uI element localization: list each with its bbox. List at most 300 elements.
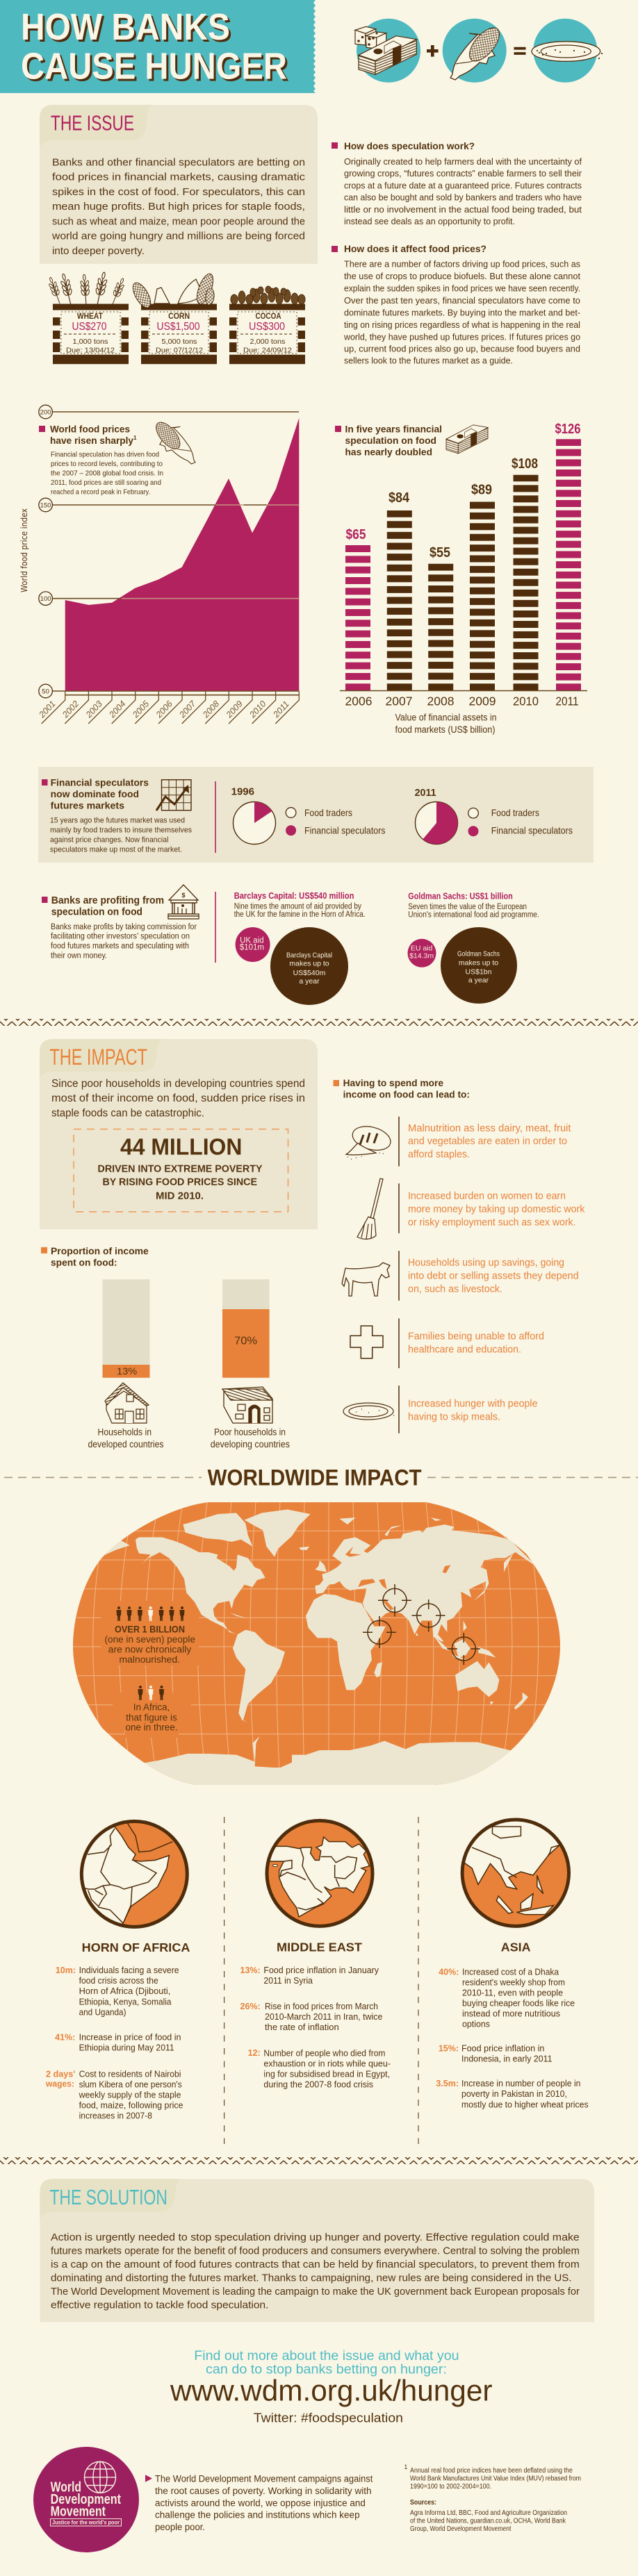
consequence: malnutrition: afford staples. xyxy=(408,1149,470,1161)
x axis year labels: 2001 xyxy=(37,699,58,720)
text block: 15 years ago: speculators make up most of the market. xyxy=(50,845,182,854)
year labels: 2008 xyxy=(427,695,455,708)
text block: issue summary: spikes in the cost of food. For speculators, this can xyxy=(52,186,305,198)
heading: worldwide impact: WORLDWIDE IMPACT xyxy=(208,1465,422,1490)
footnote and sources: Annual real food price indices have been deflated using the xyxy=(410,2467,573,2475)
text block: about WDM: the root causes of poverty. Working in solidarity with xyxy=(155,2486,372,2496)
pie chart: 2011 xyxy=(415,787,457,845)
stat: 12: exhaustion or in riots while queu- xyxy=(263,2059,391,2068)
crate: cocoa: Due: 24/09/12 xyxy=(243,346,292,354)
stat: 13%: 13%: xyxy=(240,1966,261,1975)
region: middle east xyxy=(240,1820,391,2090)
pie chart: 2011: 2011 xyxy=(415,787,436,799)
stat: 26%: the rate of inflation xyxy=(265,2022,339,2032)
land: americas and west xyxy=(104,1509,310,1785)
text block: 15 years ago: against price changes. Now financial xyxy=(50,836,168,844)
text block: in five years financial speculation xyxy=(335,424,442,458)
stat: 3.5m: poverty in Pakistan in 2010, xyxy=(461,2089,567,2099)
bars xyxy=(358,439,569,690)
text block: world food prices have risen sharply: have risen sharply xyxy=(50,435,133,446)
region: horn of africa: HORN OF AFRICA xyxy=(82,1941,190,1954)
consequence: selling assets xyxy=(342,1251,579,1301)
year labels: 2010 xyxy=(513,695,539,708)
gridlines over area xyxy=(122,505,299,599)
text block: how does speculation work: instead see deals as an opportunity to profit. xyxy=(344,217,515,226)
panel: the impact xyxy=(40,1039,318,1229)
bubble comparison: EU aid versus Goldman: makes up to xyxy=(459,958,498,967)
callout: 44 million: MID 2010. xyxy=(156,1190,204,1202)
text block: how does it affect food prices: ting on rising prices regardless of what is happening in the real xyxy=(344,320,580,330)
icon: bank xyxy=(168,885,199,919)
stat: 2 days wages: 2 days' xyxy=(46,2069,75,2079)
text block: how does speculation work xyxy=(332,140,582,226)
text block: issue summary: Banks and other financial speculators are betting on xyxy=(52,157,305,169)
pie chart: 1996: 1996 xyxy=(231,786,254,797)
equals sign xyxy=(514,49,525,53)
text block: world food prices have risen sharply: Financial speculation has driven food xyxy=(51,450,159,458)
heading: proportion of income: spent on food: xyxy=(51,1256,117,1268)
callout: in Africa: In Africa, xyxy=(133,1702,170,1713)
y axis labels: 100 xyxy=(40,595,51,603)
divider xyxy=(215,781,216,853)
text block: world food prices have risen sharply: reached a record peak in February. xyxy=(51,488,150,496)
stat: 15%: 15%: xyxy=(439,2043,459,2053)
icon: poor house xyxy=(222,1387,272,1423)
axis caption: Value of financial assets in xyxy=(395,713,496,723)
title: HOW BANKS xyxy=(21,6,230,48)
text block: banks are profiting: speculation on food xyxy=(51,906,142,917)
legend: 2011: Food traders xyxy=(491,807,539,818)
text block: about WDM: people poor. xyxy=(155,2522,205,2532)
text block: banks are profiting: food futures markets and speculating with xyxy=(51,942,189,951)
text block: issue summary: world are going hungry and millions are being forced xyxy=(51,231,305,242)
bubble comparison: EU aid versus Goldman: $14.3m xyxy=(409,952,434,960)
stat: 26%: 26%: xyxy=(240,2002,261,2011)
crate: corn: US$1,500 xyxy=(157,321,200,333)
stat: 2 days wages: Cost to residents of Nairobi xyxy=(79,2069,181,2079)
stat: 12: 12: xyxy=(248,2048,261,2058)
text block: goldman sachs xyxy=(408,890,539,920)
text block: solution summary: dominating and distorting the futures market. Thanks to campaigning, new rules are being considered in the US. xyxy=(51,2272,572,2284)
bar labels: Poor households in xyxy=(214,1427,286,1438)
x axis year labels: 2011 xyxy=(271,699,291,720)
bar labels: developing countries xyxy=(211,1439,290,1449)
crate: cocoa: COCOA xyxy=(256,313,281,321)
text block: how does speculation work: Originally created to help farmers deal with the uncertainty of xyxy=(344,157,582,167)
text block: how does speculation work: can also be bought and sold by bankers and traders who have xyxy=(344,193,582,203)
panel: the issue xyxy=(40,105,318,264)
text block: impact summary: Since poor households in developing countries spend xyxy=(51,1078,305,1090)
bubble comparison: EU aid versus Goldman: EU aid xyxy=(411,945,433,953)
text block: how does speculation work: growing crops, “futures contracts” enable farmers to sell their xyxy=(344,169,582,178)
chart: proportion of income spent on food xyxy=(41,1245,290,1449)
bubble comparison: UK aid versus Barclays: makes up to xyxy=(289,960,329,968)
consequence: selling assets: on, such as livestock. xyxy=(408,1283,502,1295)
text block: impact summary: most of their income on food, sudden price rises in xyxy=(51,1092,305,1104)
y axis labels: 150 xyxy=(40,501,51,510)
text block: solution summary: The World Development Movement is leading the campaign to make the UK government back European proposals for xyxy=(51,2286,580,2297)
callout: in Africa: one in three. xyxy=(125,1722,178,1733)
callout: 44 million: 44 MILLION xyxy=(120,1134,242,1160)
text block: world food prices have risen sharply: 1 xyxy=(133,435,137,441)
bar value labels: $126 xyxy=(555,422,581,437)
stat: 2 days wages: weekly supply of the staple xyxy=(79,2091,181,2100)
footnote and sources: Group, World Development Movement xyxy=(410,2525,512,2533)
stat: 12: ing for subsidised bread in Egypt, xyxy=(263,2070,390,2079)
logo: world development movement: Movement xyxy=(51,2504,106,2519)
icon: house xyxy=(105,1383,149,1423)
legend: 2011: Financial speculators xyxy=(491,825,573,836)
y axis labels: 50 xyxy=(42,688,49,696)
consequence: selling assets: into debt or selling assets they depend xyxy=(408,1270,579,1281)
plus sign xyxy=(427,45,439,57)
text block: how does it affect food prices: world, they have pushed up futures prices. If futures prices go xyxy=(343,332,580,342)
stat: 3.5m xyxy=(436,2079,589,2109)
crate: corn: CORN xyxy=(168,313,190,321)
x axis year labels: 2006 xyxy=(154,699,174,720)
stat: 40%: resident's weekly shop from xyxy=(462,1977,565,1987)
footnote and sources: World Bank Manufactures Unit Value Index (MUV) rebased from xyxy=(410,2475,581,2482)
stat: 41%: 41%: xyxy=(55,2032,75,2042)
text block: banks are profiting xyxy=(42,895,197,961)
heading: financial speculators: futures markets xyxy=(51,799,124,811)
icon: seven people xyxy=(117,1606,185,1621)
year labels: 2006 xyxy=(345,695,373,708)
heading: the impact: THE IMPACT xyxy=(49,1045,147,1070)
stat: 40%: 40%: xyxy=(439,1967,459,1977)
baseline axis xyxy=(340,690,587,692)
consequence: burden on women: Increased burden on women to earn xyxy=(408,1191,566,1202)
bubble comparison: UK aid versus Barclays: UK aid xyxy=(240,936,264,945)
stat: 13%: Food price inflation in January xyxy=(263,1966,379,1975)
region: middle east: MIDDLE EAST xyxy=(277,1940,362,1954)
stat: 10m: food crisis across the xyxy=(79,1976,158,1986)
text block: barclays capital: Barclays Capital: US$540 million xyxy=(234,890,354,901)
bar: developing xyxy=(222,1279,270,1378)
heading: having to spend more: income on food can lead to: xyxy=(343,1088,470,1099)
icon: rising chart xyxy=(156,780,191,811)
heading: the issue: THE ISSUE xyxy=(51,111,134,135)
y axis labels: 200 xyxy=(40,408,51,417)
crate: cocoa: 2,000 tons xyxy=(250,338,285,346)
bubble comparison: EU aid versus Goldman: US$1bn xyxy=(466,967,492,976)
icon equation: gambling plus corn equals empty plate xyxy=(355,19,603,83)
panel: the solution xyxy=(40,2179,594,2322)
crate: cocoa: US$300 xyxy=(249,321,285,333)
stat: 15%: Food price inflation in xyxy=(461,2043,544,2053)
consequence: burden on women xyxy=(357,1179,585,1239)
bar labels: Households in xyxy=(97,1427,152,1438)
icon: small plate xyxy=(343,1403,394,1420)
stat: 2 days wages: wages: xyxy=(45,2079,74,2088)
crate: cocoa xyxy=(229,286,305,364)
stat: 15%: Indonesia, in early 2011 xyxy=(461,2054,553,2064)
year labels: 2009 xyxy=(468,695,496,708)
logo: world development movement: World xyxy=(51,2479,81,2495)
text block: world food prices have risen sharply xyxy=(39,424,163,496)
x axis year labels: 2010 xyxy=(247,699,268,720)
world map xyxy=(73,1502,560,1785)
divider xyxy=(215,892,216,963)
heading: having to spend more: Having to spend more xyxy=(343,1077,443,1088)
icon: corn xyxy=(443,19,507,83)
logo: world development movement: Justice for the world's poor xyxy=(52,2518,120,2525)
region: asia: ASIA xyxy=(501,1940,531,1954)
call to action: Find out more about the issue and what you xyxy=(194,2349,459,2363)
stat: 12: during the 2007-8 food crisis xyxy=(263,2080,373,2090)
stat: 2 days wages: increases in 2007-8 xyxy=(79,2111,152,2121)
call to action xyxy=(170,2349,492,2425)
callout: over 1 billion: OVER 1 BILLION xyxy=(115,1624,185,1635)
consequence: burden on women: more money by taking up domestic work xyxy=(408,1204,585,1215)
bar value labels: $65 xyxy=(346,527,366,542)
text block: about WDM: challenge the policies and institutions which keep xyxy=(155,2509,360,2520)
bubble comparison: UK aid versus Barclays: Barclays Capital xyxy=(286,951,332,959)
bar labels xyxy=(88,1427,290,1449)
icon: globe xyxy=(85,2461,115,2493)
stat: 10m: 10m: xyxy=(56,1966,76,1975)
footnote and sources: of the United Nations, guardian.co.uk, OCHA, World Bank xyxy=(410,2517,566,2525)
callout: 44 million: DRIVEN INTO EXTREME POVERTY xyxy=(97,1163,263,1174)
title xyxy=(21,6,287,88)
inland seas xyxy=(345,1547,450,1610)
y axis gridlines xyxy=(52,412,299,695)
bar value labels: $89 xyxy=(471,483,492,498)
text block: in five years financial speculation: In five years financial xyxy=(345,424,442,435)
consequence: burden on women: or risky employment such as sex work. xyxy=(408,1217,575,1228)
year labels xyxy=(345,695,578,708)
text block: 15 years ago: 15 years ago the futures market was used xyxy=(50,817,185,825)
footnote and sources: 1990=100 to 2002-2004=100. xyxy=(410,2483,491,2491)
stat: 10m: and Uganda) xyxy=(79,2007,126,2017)
icon: three people xyxy=(138,1686,164,1700)
heading: proportion of income xyxy=(41,1245,149,1268)
text block: banks are profiting: Banks are profiting from xyxy=(51,895,164,906)
crosshair markers xyxy=(363,1584,480,1665)
text block: how does it affect food prices: sellers look to the futures market as a guide. xyxy=(344,356,513,366)
stat: 10m: Individuals facing a severe xyxy=(79,1966,179,1975)
consequence: healthcare: Families being unable to afford xyxy=(408,1331,544,1343)
region: horn of africa xyxy=(45,1813,190,2121)
stat: 40% xyxy=(439,1967,575,2029)
crate: corn xyxy=(129,272,217,364)
footnote and sources: 1 xyxy=(404,2463,407,2470)
land: eurasia africa and oceania xyxy=(292,1518,534,1785)
consequence: selling assets: Households using up savings, going xyxy=(408,1258,564,1269)
icon: medical cross xyxy=(350,1326,383,1358)
text block: how does it affect food prices: dominate futures markets. By buying into the market and bet- xyxy=(344,308,580,317)
stat: 41%: Ethiopia during May 2011 xyxy=(79,2043,174,2052)
text block: impact summary xyxy=(51,1078,305,1119)
text block: in five years financial speculation: has nearly doubled xyxy=(345,447,432,458)
stat: 13% xyxy=(240,1966,379,1986)
stat: 15% xyxy=(439,2043,553,2064)
title: CAUSE HUNGER xyxy=(21,46,287,88)
crate: wheat: US$270 xyxy=(72,321,107,333)
consequence: malnutrition: and vegetables are eaten in order to xyxy=(408,1136,567,1147)
bar value labels xyxy=(346,422,581,560)
callout: 44 million: BY RISING FOOD PRICES SINCE xyxy=(103,1177,257,1188)
text block: how does it affect food prices: up, current food prices also go up, because food buyers and xyxy=(344,344,580,354)
text block: how does it affect food prices: There are a number of factors driving up food prices, such as xyxy=(344,259,580,269)
x axis year labels: 2005 xyxy=(130,699,151,720)
title shadow: HOW BANKS xyxy=(23,8,232,50)
crate: wheat: WHEAT xyxy=(77,313,103,321)
stat: 10m: Horn of Africa (Djibouti, xyxy=(79,1986,170,1996)
text block: world food prices have risen sharply: prices to record levels, contributing to xyxy=(51,460,163,468)
text block: how does it affect food prices: Over the past ten years, financial speculators have come to xyxy=(344,296,580,306)
crate: wheat: Due: 13/04/12 xyxy=(66,346,115,354)
callout: 44 million xyxy=(74,1129,288,1212)
stat: 26% xyxy=(240,2002,382,2032)
y axis title: World food price index xyxy=(19,508,29,592)
text block: banks are profiting: facilitating other investors’ speculation on xyxy=(51,933,190,941)
stat: 10m: Ethiopia, Kenya, Somalia xyxy=(79,1997,172,2006)
icon: dice and money xyxy=(355,19,420,83)
icon: cow xyxy=(342,1263,390,1296)
text block: issue summary: into deeper poverty. xyxy=(52,245,145,257)
bar value labels: $84 xyxy=(388,490,410,506)
logo: world development movement: Development xyxy=(51,2492,121,2507)
stat: 40%: Increased cost of a Dhaka xyxy=(462,1967,559,1977)
x axis year labels: 2004 xyxy=(107,699,128,720)
heading: financial speculators xyxy=(42,777,149,811)
stat: 13%: 2011 in Syria xyxy=(263,1976,313,1986)
text block: banks are profiting: their own money. xyxy=(51,952,107,961)
title shadow: CAUSE HUNGER xyxy=(23,47,289,89)
consequence: hunger: having to skip meals. xyxy=(408,1411,500,1422)
text block: goldman sachs: Goldman Sachs: US$1 billion xyxy=(408,890,513,901)
year labels: 2007 xyxy=(385,695,413,708)
consequence: malnutrition: Malnutrition as less dairy, meat, fruit xyxy=(408,1123,571,1134)
consequence: hunger: Increased hunger with people xyxy=(408,1399,538,1410)
icon: bank: $ xyxy=(181,892,186,899)
panel: financial speculators dominate xyxy=(38,767,594,863)
map: middle east xyxy=(266,1820,373,1927)
map: asia xyxy=(460,1818,571,1928)
stat: 12: Number of people who died from xyxy=(263,2048,385,2058)
footnote and sources: Sources: xyxy=(410,2499,436,2507)
bar: developing: 70% xyxy=(234,1336,257,1347)
text block: solution summary: effective regulation to tackle food speculation. xyxy=(51,2299,268,2311)
stat: 40%: instead of more nutritious xyxy=(462,2009,560,2019)
consequence: healthcare xyxy=(350,1318,544,1368)
stat: 3.5m: 3.5m: xyxy=(436,2079,459,2088)
stat: 41% xyxy=(55,2032,181,2052)
call to action: Twitter: #foodspeculation xyxy=(254,2411,403,2425)
text block: about WDM xyxy=(145,2473,373,2532)
crate: corn: 5,000 tons xyxy=(161,338,197,346)
bubble comparison: UK aid versus Barclays: $101m xyxy=(240,943,264,952)
text block: solution summary xyxy=(51,2232,580,2311)
text block: goldman sachs: Seven times the value of the European xyxy=(408,903,527,911)
callout: over 1 billion: malnourished. xyxy=(120,1654,180,1665)
bar labels: developed countries xyxy=(88,1439,164,1449)
text block: about WDM: activists around the world, we oppose injustice and xyxy=(155,2498,366,2508)
heading: the solution: THE SOLUTION xyxy=(49,2185,167,2209)
x axis year labels: 2003 xyxy=(83,699,104,720)
text block: issue summary xyxy=(51,157,306,257)
pie chart: 1996 xyxy=(231,786,275,845)
bubble comparison: EU aid versus Goldman xyxy=(407,927,517,1004)
x axis year labels: 2008 xyxy=(200,699,221,720)
chart: value of financial assets in food markets xyxy=(340,422,587,735)
x axis ticks xyxy=(42,691,299,724)
text block: how does speculation work: How does speculation work? xyxy=(344,140,475,151)
legend: 1996 xyxy=(286,807,385,836)
consequence: hunger xyxy=(343,1386,538,1434)
x axis year labels xyxy=(37,699,291,720)
text block: world food prices have risen sharply: 2011, food prices are still soaring and xyxy=(51,479,161,487)
text block: in five years financial speculation: speculation on food xyxy=(345,435,436,446)
area series xyxy=(65,418,299,691)
text knockouts xyxy=(101,1601,199,1738)
stat: 40%: 2010-11, even with people xyxy=(462,1988,563,1998)
heading: financial speculators: Financial speculators xyxy=(51,777,149,788)
text block: barclays capital: Nine times the amount of aid provided by xyxy=(234,903,361,911)
footnote and sources xyxy=(404,2463,581,2533)
text block: barclays capital: the UK for the famine in the Horn of Africa. xyxy=(234,911,366,919)
legend: 1996: Food traders xyxy=(304,807,352,818)
text block: barclays capital xyxy=(234,890,366,919)
stat: 2 days wages xyxy=(45,2069,183,2121)
text block: how does speculation work: little or no involvement in the actual food being traded, but xyxy=(344,205,582,215)
legend: 2011 xyxy=(468,807,573,836)
chart: world food price index xyxy=(19,405,299,724)
heading: proportion of income: Proportion of income xyxy=(51,1245,149,1256)
stat: 41%: Increase in price of food in xyxy=(79,2032,181,2042)
text block: issue summary: food prices in financial markets, causing dramatic xyxy=(52,172,306,183)
stat: 26%: 2010-March 2011 in Iran, twice xyxy=(265,2012,382,2022)
x axis year labels: 2002 xyxy=(60,699,81,720)
icon: broom xyxy=(357,1179,383,1239)
callout: over 1 billion: (one in seven) people xyxy=(104,1634,195,1645)
text block: goldman sachs: Union's international food aid programme. xyxy=(408,911,539,920)
icon: money small xyxy=(446,425,488,454)
text block: how does speculation work: crops at a future date at a guaranteed price. Futures contracts xyxy=(344,181,582,190)
text block: 15 years ago xyxy=(50,817,192,854)
text block: how does it affect food prices: How does it affect food prices? xyxy=(344,243,486,254)
text block: 15 years ago: mainly by food traders to insure themselves xyxy=(50,826,192,834)
stat: 2 days wages: slum Kibera of one person's xyxy=(79,2079,182,2089)
stat: 40%: buying cheaper foods like rice xyxy=(462,1999,575,2009)
heading: financial speculators: now dominate food xyxy=(51,788,139,799)
x axis year labels: 2009 xyxy=(224,699,245,720)
text block: solution summary: futures markets operate for the benefit of food producers and consumers everywhere. Central to solving the problem xyxy=(51,2245,580,2257)
footnote and sources: Agra Informa Ltd, BBC, Food and Agriculture Organization xyxy=(410,2509,567,2517)
consequence: malnutrition xyxy=(346,1117,571,1166)
axis caption xyxy=(395,713,496,735)
stat: 26%: Rise in food prices from March xyxy=(265,2002,378,2011)
call to action: www.wdm.org.uk/hunger xyxy=(170,2374,492,2407)
heading: having to spend more xyxy=(334,1077,470,1099)
text block: banks are profiting: Banks make profits by taking commission for xyxy=(51,923,197,931)
bubble comparison: UK aid versus Barclays: US$540m xyxy=(293,969,326,977)
callout: in Africa: that figure is xyxy=(126,1712,177,1722)
stat: 12 xyxy=(248,2048,391,2090)
legend: 1996: Financial speculators xyxy=(304,825,385,836)
region: asia xyxy=(436,1815,589,2109)
axis caption: food markets (US$ billion) xyxy=(395,724,495,735)
call to action: can do to stop banks betting on hunger: xyxy=(206,2363,447,2377)
text block: how does it affect food prices: the use of crops to produce biofuels. But these alone cannot xyxy=(344,272,581,281)
text block: how does it affect food prices xyxy=(332,243,581,366)
icon: grain xyxy=(346,1122,393,1159)
text block: world food prices have risen sharply: World food prices xyxy=(50,424,130,435)
callout: in Africa xyxy=(125,1686,178,1733)
text block: solution summary: is a cap on the amount of food futures contracts that can be held by financial speculators, to prevent them from xyxy=(51,2259,580,2270)
logo: world development movement xyxy=(33,2447,139,2552)
